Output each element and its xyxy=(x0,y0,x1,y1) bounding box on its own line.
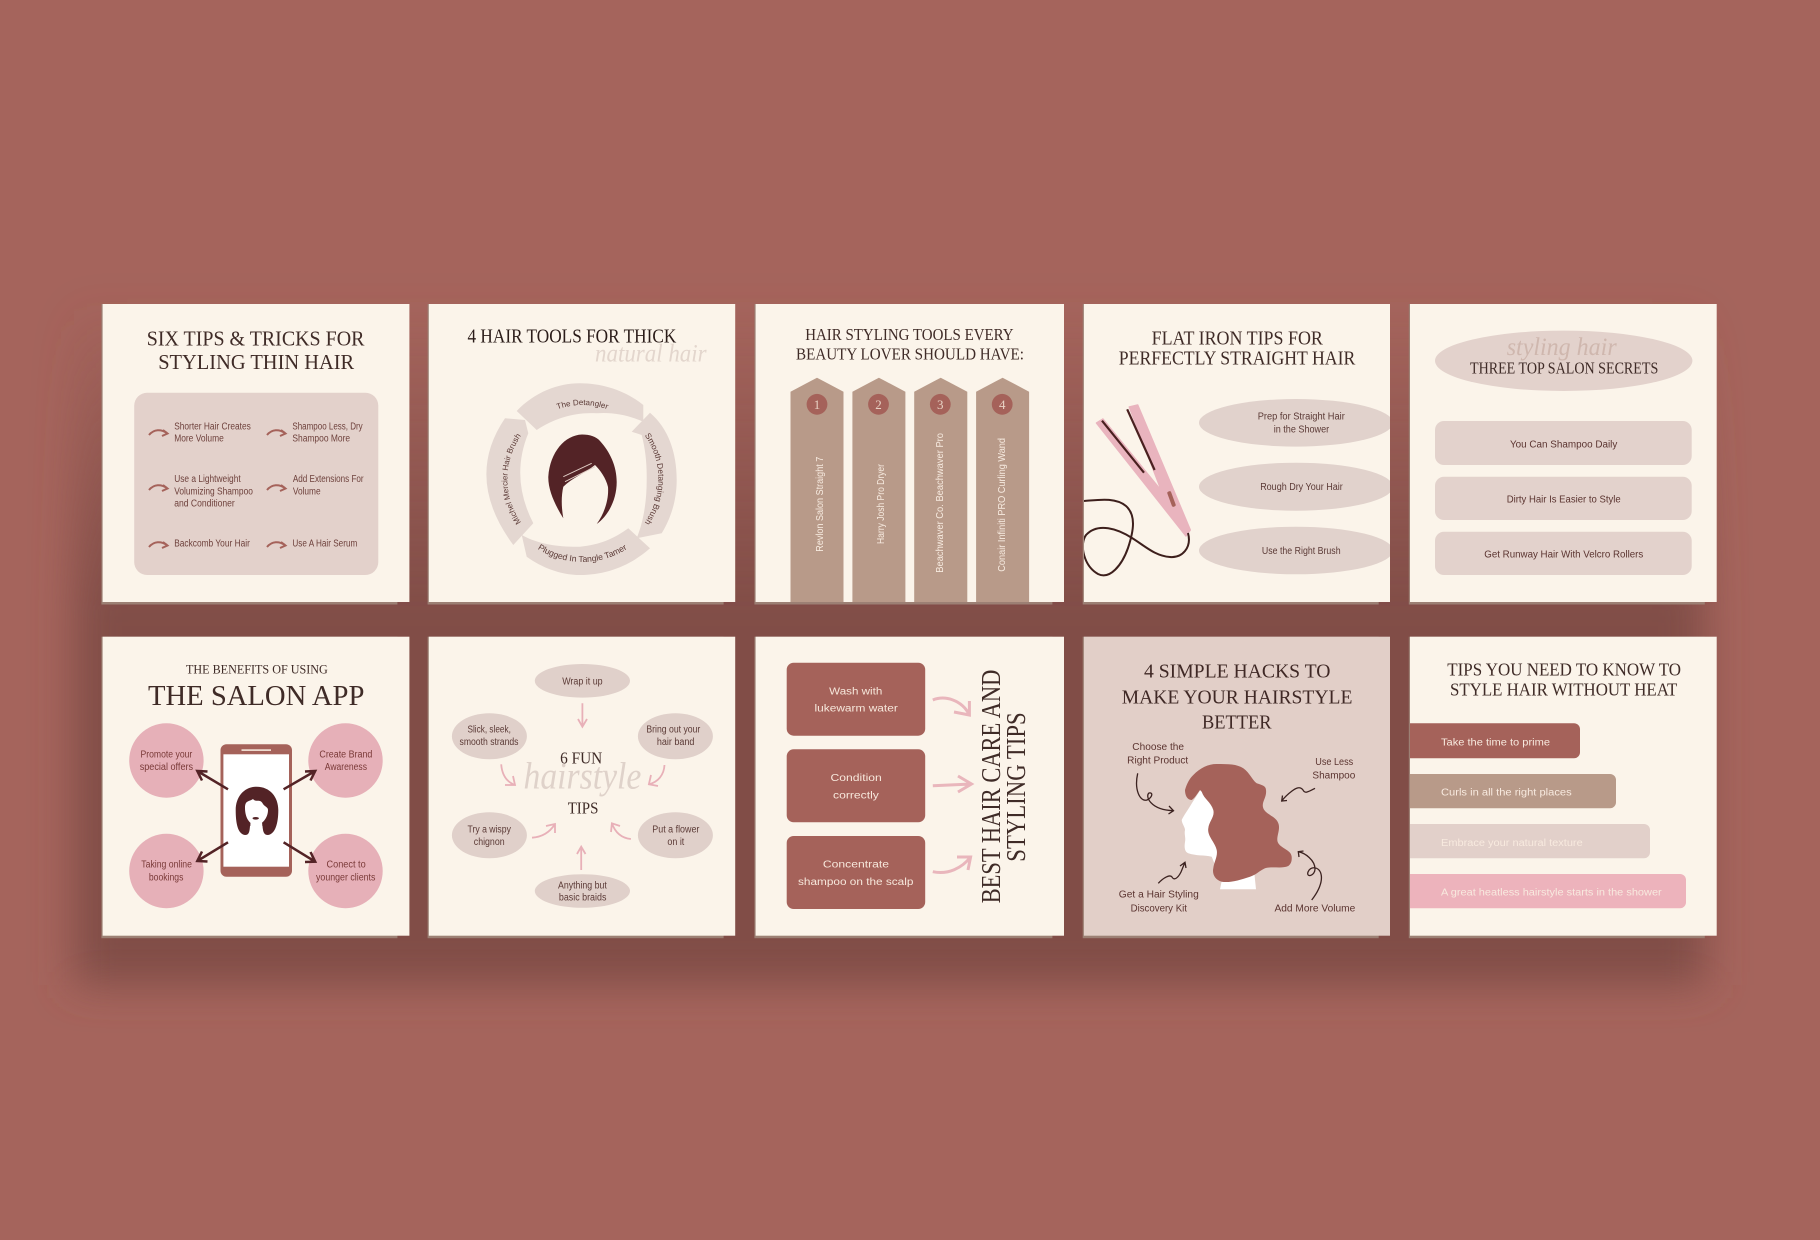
tip text: Prep for Straight Hair xyxy=(1258,411,1345,422)
group shadow xyxy=(74,300,1706,985)
tip text: smooth strands xyxy=(460,737,518,748)
banner labels: Revlon Salon Straight 7 xyxy=(815,456,826,552)
icon: woman face xyxy=(236,787,278,837)
title: STYLE HAIR WITHOUT HEAT xyxy=(1450,680,1678,700)
tips text: Add Extensions For xyxy=(293,474,364,485)
panel: the salon app xyxy=(101,637,409,938)
tips text: More Volume xyxy=(174,434,224,445)
title: STYLING THIN HAIR xyxy=(158,350,354,374)
secret text: Dirty Hair Is Easier to Style xyxy=(1507,494,1621,505)
script subtitle: natural hair xyxy=(595,341,707,368)
tip text: Try a wispy xyxy=(468,824,511,835)
title ellipse xyxy=(1435,331,1692,391)
tip text: Concentrate xyxy=(823,860,890,871)
tip text: in the Shower xyxy=(1274,425,1330,436)
banner labels: Harry Josh Pro Dryer xyxy=(876,463,887,544)
tip text: correctly xyxy=(833,790,879,801)
panel: 6 fun hairstyle tips xyxy=(428,637,735,938)
ring labels: Smooth Detanging Brush xyxy=(644,433,664,524)
tips text: and Conditioner xyxy=(174,499,235,510)
arrows xyxy=(501,703,664,870)
tips text: Volumizing Shampoo xyxy=(174,486,253,497)
secret boxes xyxy=(1435,421,1692,575)
title xyxy=(1119,328,1355,369)
title: SIX TIPS & TRICKS FOR xyxy=(147,327,364,351)
labels: Right Product xyxy=(1127,756,1188,767)
subtitle: THE BENEFITS OF USING xyxy=(186,661,328,676)
tip text xyxy=(798,686,914,888)
tip text xyxy=(460,676,701,903)
vertical title: BEST HAIR CARE AND xyxy=(976,670,1006,903)
tip text: Wash with xyxy=(829,686,882,697)
benefit text: Promote your xyxy=(140,749,193,760)
benefit text xyxy=(140,749,375,883)
title xyxy=(796,325,1024,363)
title: FLAT IRON TIPS FOR xyxy=(1152,328,1323,349)
panel: six tips and tricks xyxy=(101,304,409,604)
tip text: basic braids xyxy=(559,892,606,903)
tips text: Shampoo More xyxy=(292,434,350,445)
tips text: Use a Lightweight xyxy=(174,474,241,485)
benefit circles xyxy=(129,723,383,908)
tips text: Shampoo Less, Dry xyxy=(292,421,363,432)
icon: flat iron xyxy=(1083,405,1190,575)
title xyxy=(1447,660,1681,700)
tips text xyxy=(174,421,364,550)
panel: tips without heat xyxy=(1409,637,1717,938)
panel: hair styling tools xyxy=(754,304,1064,604)
labels xyxy=(1119,742,1356,915)
panel: 4 simple hacks xyxy=(1083,637,1390,938)
benefit text: Awareness xyxy=(325,762,367,773)
title: PERFECTLY STRAIGHT HAIR xyxy=(1119,348,1355,369)
benefit text: special offers xyxy=(140,762,193,773)
center title: TIPS xyxy=(568,798,598,817)
curly arrows xyxy=(1137,773,1321,900)
vertical title xyxy=(976,670,1031,903)
labels: Shampoo xyxy=(1312,770,1356,781)
tip text: Anything but xyxy=(558,880,607,891)
tip text: on it xyxy=(667,837,684,848)
benefit text: younger clients xyxy=(316,872,375,883)
arrows xyxy=(933,698,972,873)
title: BEAUTY LOVER SHOULD HAVE: xyxy=(796,344,1024,363)
title: TIPS YOU NEED TO KNOW TO xyxy=(1447,660,1681,680)
icon: woman profile xyxy=(1182,764,1292,889)
benefit text: Conect to xyxy=(326,860,366,871)
banners xyxy=(790,378,1029,602)
tip text xyxy=(1258,411,1345,557)
icon: phone xyxy=(220,744,292,877)
tip text: Slick, sleek, xyxy=(468,724,511,735)
tips text: Volume xyxy=(293,486,321,497)
title xyxy=(147,327,364,374)
center title: hairstyle xyxy=(524,755,641,797)
ring labels: The Detangler xyxy=(556,400,608,409)
labels: Add More Volume xyxy=(1274,904,1356,915)
labels: Discovery Kit xyxy=(1131,904,1187,915)
arrows xyxy=(149,430,286,548)
title: THREE TOP SALON SECRETS xyxy=(1470,358,1658,377)
secret text: Get Runway Hair With Velcro Rollers xyxy=(1484,549,1643,560)
labels: Choose the xyxy=(1132,742,1184,753)
tip text: Use the Right Brush xyxy=(1262,546,1341,557)
labels: Get a Hair Styling xyxy=(1119,890,1199,901)
tip bar text: Take the time to prime xyxy=(1441,738,1550,749)
title xyxy=(1122,661,1352,733)
tip text: hair band xyxy=(657,737,694,748)
title: 4 SIMPLE HACKS TO xyxy=(1144,661,1330,683)
panel: best hair care xyxy=(754,637,1064,938)
tips text: Backcomb Your Hair xyxy=(174,539,250,550)
tip ellipses xyxy=(1199,399,1393,574)
tip bar text: Curls in all the right places xyxy=(1441,788,1572,799)
center title xyxy=(524,748,641,817)
vertical title: STYLING TIPS xyxy=(1001,712,1031,862)
benefit text: Create Brand xyxy=(319,749,372,760)
secret text: You Can Shampoo Daily xyxy=(1510,440,1617,451)
tip text: shampoo on the scalp xyxy=(798,877,914,888)
tip text: Put a flower xyxy=(652,824,700,835)
tip boxes xyxy=(787,663,925,909)
tips text: Shorter Hair Creates xyxy=(174,421,251,432)
banner labels: Conair Infiniti PRO Curling Wand xyxy=(997,438,1008,572)
tip text: Condition xyxy=(830,773,882,784)
tip bars xyxy=(1410,723,1686,908)
tip text: Rough Dry Your Hair xyxy=(1260,482,1343,493)
benefit text: Taking online xyxy=(141,860,192,871)
number badges: 3 xyxy=(937,397,944,412)
tips box xyxy=(134,393,378,575)
ring labels: Michel Mercier Hair Brush xyxy=(502,434,521,525)
tip bar text: Embrace your natural texture xyxy=(1441,838,1583,849)
tip text: lukewarm water xyxy=(814,704,899,715)
title: THE SALON APP xyxy=(148,680,364,712)
tip text: Bring out your xyxy=(646,724,701,735)
arrow ring xyxy=(486,383,677,575)
number badges xyxy=(807,394,1013,415)
banner labels xyxy=(815,433,1008,573)
title: MAKE YOUR HAIRSTYLE xyxy=(1122,686,1352,708)
arrows xyxy=(197,771,315,862)
panel: flat iron tips xyxy=(1083,304,1393,604)
tip bar text: A great heatless hairstyle starts in the shower xyxy=(1441,888,1662,899)
number badges: 2 xyxy=(875,397,882,412)
benefit text: bookings xyxy=(149,872,183,883)
ring labels: Plugged In Tangle Tamer xyxy=(538,544,626,563)
secret text xyxy=(1484,440,1643,560)
title: BETTER xyxy=(1202,711,1272,733)
ring labels xyxy=(502,400,664,563)
center title: 6 FUN xyxy=(560,748,602,767)
title: HAIR STYLING TOOLS EVERY xyxy=(805,325,1014,344)
tip text: chignon xyxy=(474,837,505,848)
banner labels: Beachwaver Co. Beachwaver Pro xyxy=(935,433,946,573)
tip ellipses xyxy=(452,664,713,908)
icon: hair xyxy=(548,434,617,524)
tip bar text xyxy=(1441,738,1662,899)
tips text: Use A Hair Serum xyxy=(292,539,357,550)
script subtitle: styling hair xyxy=(1507,334,1617,361)
panel: 4 hair tools xyxy=(428,304,736,604)
panel: three top salon secrets xyxy=(1409,304,1717,604)
labels: Use Less xyxy=(1315,757,1353,768)
title: 4 HAIR TOOLS FOR THICK xyxy=(468,326,677,348)
number badges: 4 xyxy=(999,397,1006,412)
tip text: Wrap it up xyxy=(562,676,603,687)
number badges: 1 xyxy=(814,397,820,412)
